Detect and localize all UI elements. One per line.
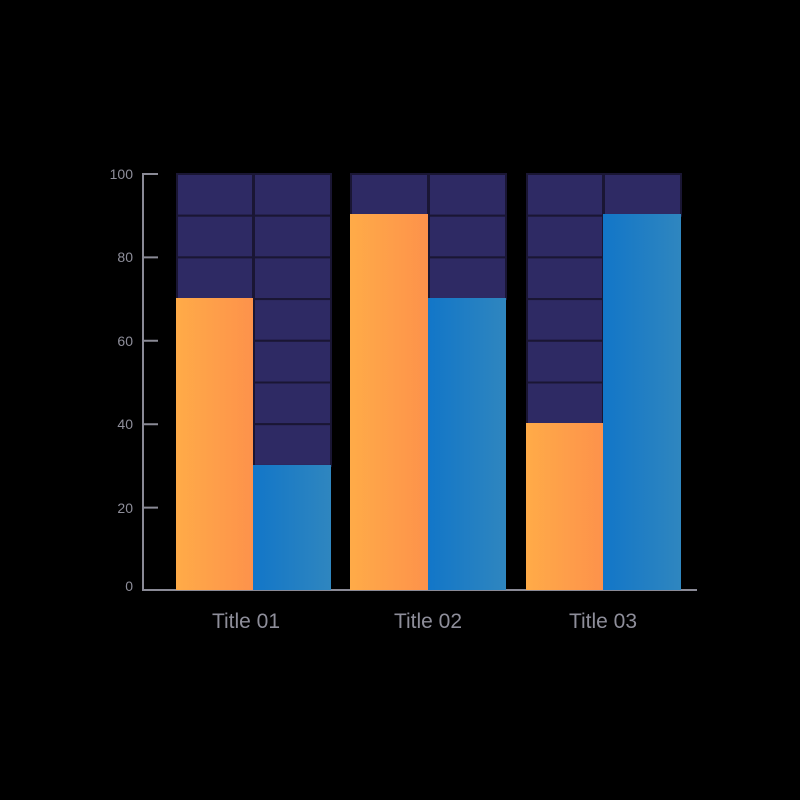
group: Title 03 xyxy=(526,174,681,590)
y axis labels: 40 xyxy=(117,416,133,432)
y axis labels: 60 xyxy=(117,333,133,349)
x axis labels: Title 02 xyxy=(394,610,462,633)
y axis labels: 0 xyxy=(125,578,133,594)
group: Title 02 xyxy=(350,174,506,590)
y axis xyxy=(143,174,697,590)
x axis labels: Title 03 xyxy=(569,610,637,633)
y axis labels xyxy=(110,166,133,594)
x axis labels xyxy=(212,610,637,633)
y axis labels: 20 xyxy=(117,500,133,516)
y axis labels: 80 xyxy=(117,249,133,265)
group: Title 01 xyxy=(176,174,331,590)
y axis labels: 100 xyxy=(110,166,133,182)
x axis labels: Title 01 xyxy=(212,610,280,633)
